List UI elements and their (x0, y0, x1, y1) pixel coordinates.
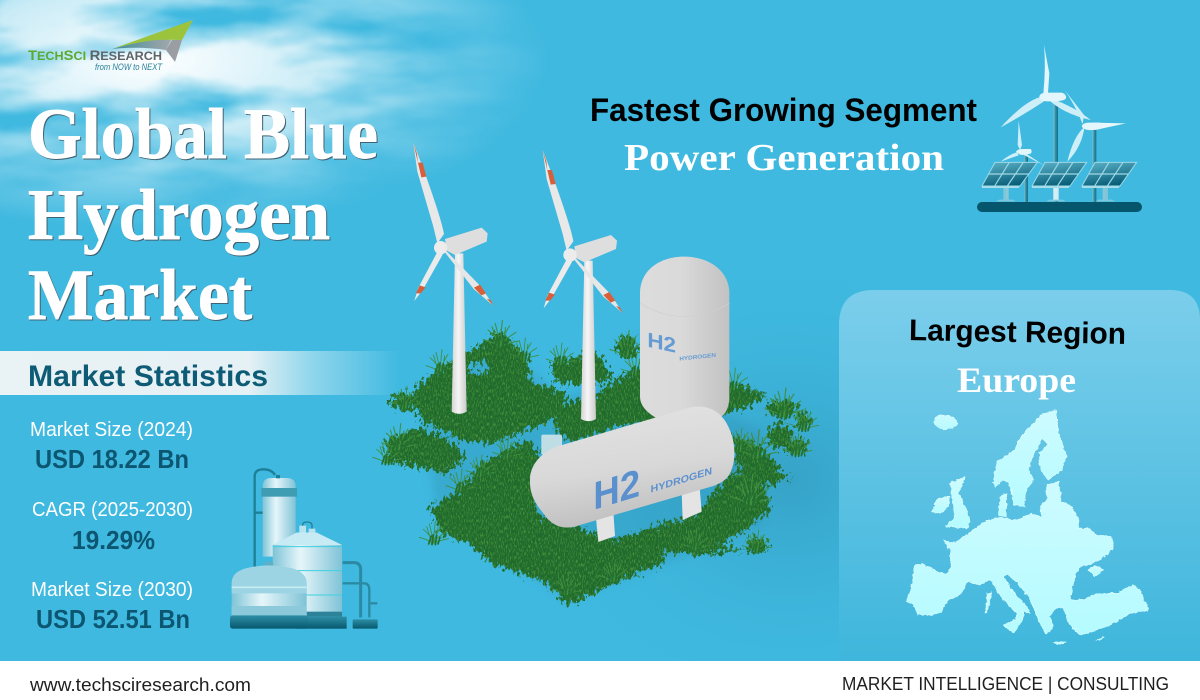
horizontal hydrogen tank: H2 (593, 461, 640, 519)
logo wordmark: TECHSCI RESEARCH (28, 47, 162, 63)
vertical hydrogen tank: H2 (647, 329, 676, 358)
clouds (0, 0, 550, 230)
stat: market size 2024: Market Size (2024) (30, 419, 193, 441)
logo swoosh (112, 20, 193, 62)
solar panels (982, 162, 1137, 201)
heading: fastest growing segment: Power Generation (624, 137, 944, 179)
stat: market size 2030: USD 52.51 Bn (36, 604, 190, 634)
region name: Europe (957, 360, 1076, 400)
stat: market size 2024 (30, 419, 193, 474)
heading: fastest growing segment: Fastest Growing Segment (590, 92, 977, 128)
band: Market Statistics heading (0, 351, 400, 395)
title: Hydrogen (28, 175, 330, 255)
stat: CAGR (32, 499, 193, 555)
wind turbine left (413, 143, 493, 414)
vertical hydrogen tank: HYDROGEN (679, 353, 716, 363)
logo tagline: from NOW to NEXT (95, 62, 163, 72)
vertical hydrogen tank (640, 257, 729, 420)
small box (541, 435, 562, 455)
heading: fastest growing segment (590, 92, 977, 179)
heading: largest region: Largest Region (909, 314, 1126, 351)
central illustration: wind turbines, hydrogen tanks and grass (373, 143, 819, 605)
icon: wind turbines and solar panels (977, 45, 1142, 212)
stat: CAGR: CAGR (2025-2030) (32, 499, 193, 521)
market statistics values (30, 419, 193, 634)
title (28, 94, 378, 335)
grass island (385, 330, 811, 605)
grass tufts (373, 320, 819, 596)
title: Market (28, 255, 252, 335)
footer website: www.techsciresearch.com (29, 675, 251, 695)
stat: market size 2024: USD 18.22 Bn (35, 444, 189, 474)
scene shadow (520, 250, 1060, 700)
icon: refinery tanks (230, 469, 378, 629)
stat: market size 2030 (31, 579, 193, 634)
panel: largest region (839, 290, 1200, 661)
logo: TechSci Research (28, 20, 193, 72)
band: Market Statistics heading: Market Statistics (28, 360, 268, 393)
footer tagline: MARKET INTELLIGENCE | CONSULTING (842, 674, 1169, 694)
title: Global Blue (28, 94, 378, 174)
map of Europe (906, 410, 1148, 644)
stat: market size 2030: Market Size (2030) (31, 579, 193, 601)
horizontal hydrogen tank (530, 406, 734, 542)
footer band (0, 661, 1200, 700)
grass soft shadow (420, 343, 763, 600)
horizontal hydrogen tank: HYDROGEN (651, 466, 712, 496)
stat: CAGR: 19.29% (72, 525, 155, 555)
wind turbine right (543, 150, 623, 421)
